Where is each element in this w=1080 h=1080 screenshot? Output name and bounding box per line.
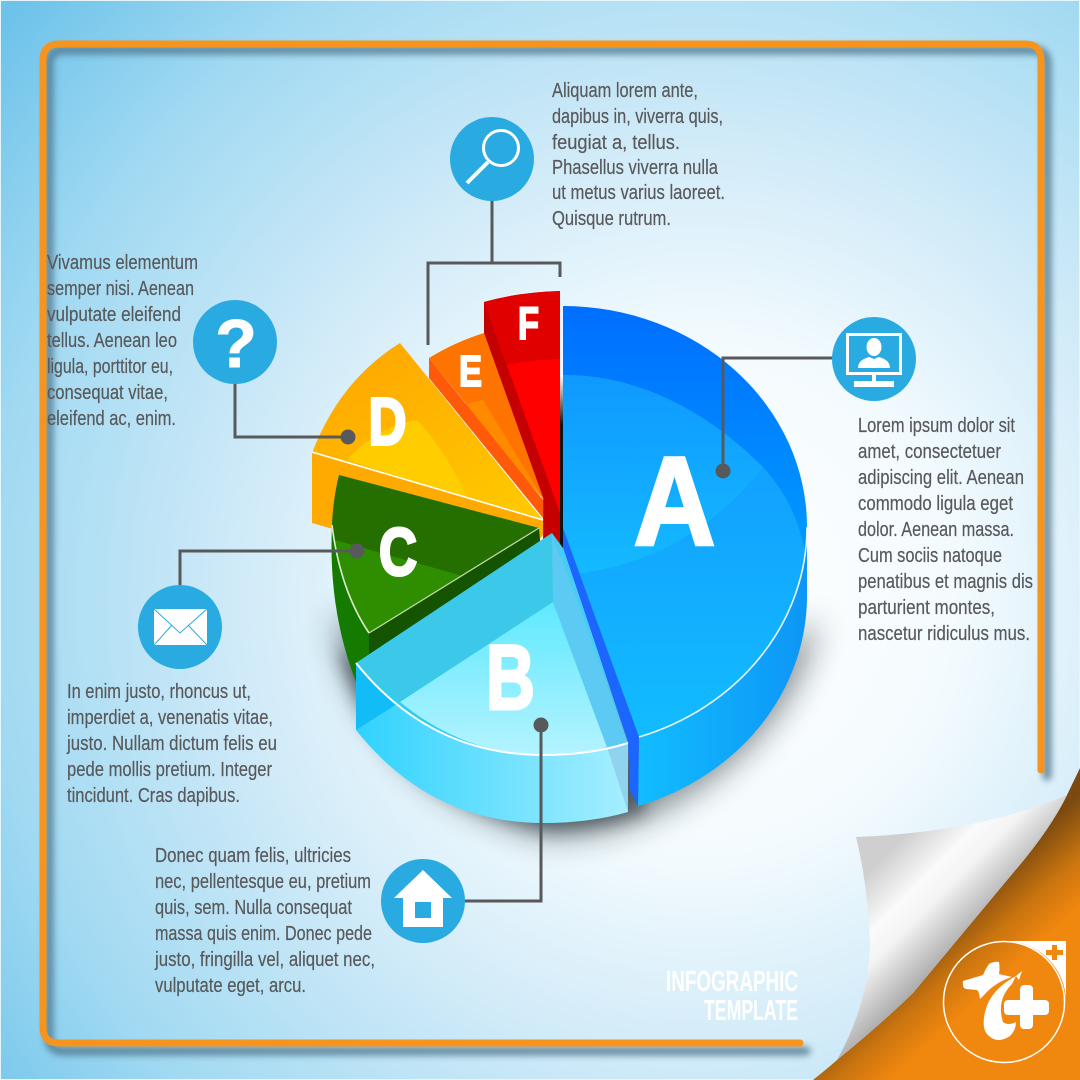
text: slice D: ligula, porttitor eu, [47,356,173,378]
text: slice C: pede mollis pretium. Integer [67,759,272,781]
slice B [356,533,628,823]
text: slice A: parturient montes, [858,597,995,619]
text: slice D: vulputate eleifend [47,304,181,326]
title: infographic template [666,966,798,1027]
text: slice B: quis, sem. Nulla consequat [155,897,352,919]
text: slice C: In enim justo, rhoncus ut, [67,681,251,703]
slice letters [368,298,716,729]
text: slice A: Cum sociis natoque [858,545,1002,567]
text: slice D: tellus. Aenean leo [47,330,177,352]
icon: envelope [138,585,222,669]
text: slice B: justo, fringilla vel, aliquet nec, [154,949,375,971]
slice C [331,475,540,682]
icon: presenter monitor [832,317,916,401]
text: slice D: eleifend ac, enim. [47,408,176,430]
slice letters: B [486,627,535,729]
slice F [484,291,560,560]
text: slice C: tincidunt. Cras dapibus. [67,785,240,807]
page curl corner [813,768,1080,1080]
logo [944,941,1066,1062]
text: slice A: adipiscing elit. Aenean [858,467,1024,489]
slice A [563,306,810,806]
text: slice C: imperdiet a, venenatis vitae, [67,707,273,729]
text: search callout: ut metus varius laoreet. [552,182,725,204]
text: slice C: justo. Nullam dictum felis eu [66,733,277,755]
text: slice C [66,681,277,807]
text: slice D: Vivamus elementum [47,252,198,274]
text: slice A: commodo ligula eget [858,493,1013,515]
text: slice D [47,252,198,430]
slice letters: E [459,347,482,396]
slice D [312,343,543,540]
slice letters: A [634,430,716,572]
text: search callout: Aliquam lorem ante, [552,80,698,102]
text: slice A: dolor. Aenean massa. [858,519,1014,541]
text: slice A: Lorem ipsum dolor sit [858,415,1015,437]
text: search callout: Phasellus viverra nulla [552,157,719,179]
pie shadow [335,620,818,836]
text: search callout: dapibus in, viverra quis, [552,106,723,128]
icon: house [381,859,465,943]
icon: magnifier [450,117,534,201]
slice letters: C [379,515,417,590]
text: slice A: amet, consectetuer [858,441,1001,463]
title: infographic template: TEMPLATE [704,995,798,1027]
text: slice B: nec, pellentesque eu, pretium [155,871,371,893]
icon: question mark [193,300,277,384]
text: slice D: consequat vitae, [47,382,168,404]
text: slice A: penatibus et magnis dis [858,571,1033,593]
title: infographic template: INFOGRAPHIC [666,966,798,998]
text: search callout [552,80,725,230]
slice E [429,333,544,518]
text: slice B: massa quis enim. Donec pede [155,923,372,945]
text: search callout: feugiat a, tellus. [552,132,680,154]
text: slice A: nascetur ridiculus mus. [858,623,1030,645]
text: slice B: vulputate eget, arcu. [155,975,306,997]
text: slice D: semper nisi. Aenean [47,278,194,300]
divider line [560,375,563,556]
pie chart [312,291,810,823]
connector lines [180,200,833,901]
slice letters: F [518,298,539,349]
text: slice B: Donec quam felis, ultricies [155,845,351,867]
icon: question mark: ? [215,306,257,382]
text: search callout: Quisque rutrum. [552,208,671,230]
text: slice A [858,415,1033,645]
slice letters: D [368,384,406,460]
text: slice B [154,845,375,997]
